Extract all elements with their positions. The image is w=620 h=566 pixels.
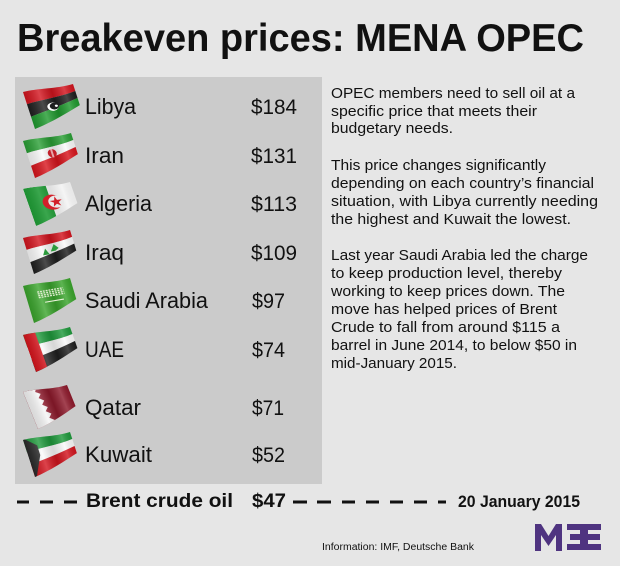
flag: Saudi Arabia (23, 278, 81, 323)
text block: explanation: depending on each country’s financial (331, 175, 594, 192)
row: Algeria (85, 191, 297, 216)
row: Kuwait: Kuwait (85, 442, 152, 467)
text block: explanation: move has helped prices of Brent (331, 301, 558, 318)
flag: Libya (23, 84, 85, 129)
text block: explanation: the highest and Kuwait the lowest. (331, 211, 571, 228)
flag: Kuwait (23, 432, 77, 477)
row: UAE: UAE (85, 337, 124, 362)
brent crude reference line (17, 490, 580, 512)
row: Qatar (85, 395, 284, 420)
text block: explanation: Crude to fall from around $115 a (331, 319, 561, 336)
text block: explanation: barrel in June 2014, to below $50 in (331, 337, 577, 354)
flag: Algeria (23, 182, 78, 226)
row: Iraq: Iraq (85, 240, 124, 265)
text block: explanation: working to keep prices down. The (330, 283, 565, 300)
text block: explanation: to keep production level, thereby (331, 265, 563, 282)
text block: explanation: mid-January 2015. (331, 355, 457, 372)
brent crude reference line: Brent crude oil (86, 491, 233, 512)
text block: explanation: specific price that meets their (331, 103, 537, 120)
brent crude reference line: $47 (252, 490, 286, 512)
row: Saudi Arabia: $97 (252, 290, 285, 313)
text block: explanation (330, 85, 598, 372)
panel: country list (15, 77, 322, 484)
row: Qatar: $71 (252, 397, 284, 420)
text block: explanation: budgetary needs. (331, 120, 453, 137)
row: Libya: Libya (85, 94, 137, 119)
row: Libya (85, 94, 297, 119)
flag: Iraq (23, 230, 81, 274)
flag: Qatar (23, 385, 76, 429)
logo: MEE (535, 524, 601, 551)
row: UAE (85, 337, 285, 362)
flag: UAE (23, 327, 78, 372)
row: Iran (85, 143, 297, 168)
row: UAE: $74 (252, 339, 285, 362)
title: Breakeven prices: MENA OPEC (17, 17, 584, 60)
row: Saudi Arabia: Saudi Arabia (85, 288, 209, 313)
text block: explanation: OPEC members need to sell oil at a (331, 85, 576, 102)
row: Qatar: Qatar (85, 395, 141, 420)
row: Iraq (85, 240, 297, 265)
source credit: Information: IMF, Deutsche Bank (322, 542, 475, 553)
row: Algeria: Algeria (85, 191, 153, 216)
row: Iran: Iran (85, 143, 124, 168)
row: Algeria: $113 (251, 193, 297, 216)
row: Libya: $184 (251, 96, 297, 119)
row: Kuwait: $52 (252, 444, 285, 467)
row: Iran: $131 (251, 145, 297, 168)
row: Kuwait (85, 442, 285, 467)
text block: explanation: This price changes significantly (331, 157, 547, 174)
flag: Iran (23, 133, 83, 178)
text block: explanation: Last year Saudi Arabia led the charge (331, 247, 588, 264)
row: Saudi Arabia (85, 288, 285, 313)
text block: explanation: situation, with Libya currently needing (331, 193, 598, 210)
row: Iraq: $109 (251, 242, 297, 265)
brent crude reference line: 20 January 2015 (458, 493, 580, 511)
